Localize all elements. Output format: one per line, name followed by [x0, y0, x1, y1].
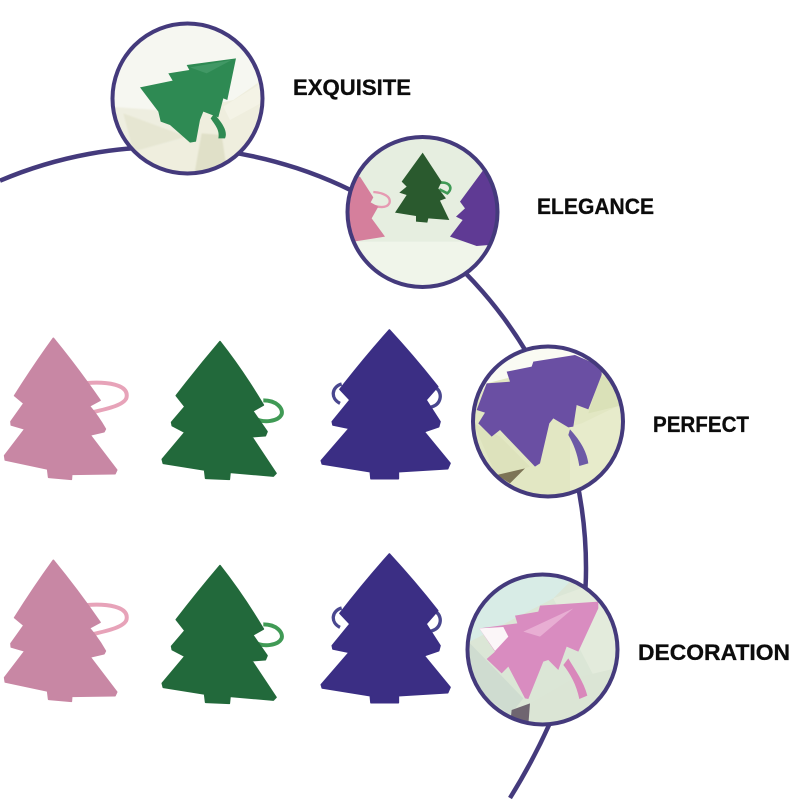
- product: pink tree ring, row 2: [5, 560, 127, 701]
- product: blue tree ring, row 2: [321, 554, 450, 703]
- photo circle: pink tree on napkin: [466, 572, 620, 726]
- product: green tree ring, row 1: [162, 342, 282, 479]
- label: ELEGANCE: ELEGANCE: [537, 194, 654, 219]
- product: pink tree ring, row 1: [5, 338, 127, 479]
- product: green tree ring, row 2: [162, 566, 282, 703]
- photo circle: three tree rings on a plate: [346, 135, 500, 289]
- product: blue tree ring, row 1: [321, 330, 450, 479]
- connecting arc: [0, 147, 586, 798]
- label: PERFECT: PERFECT: [653, 412, 750, 437]
- photo circle: green tree on napkin: [107, 20, 267, 180]
- photo circle: purple tree on napkin: [471, 344, 625, 498]
- label: EXQUISITE: EXQUISITE: [293, 75, 411, 100]
- label: DECORATION: DECORATION: [638, 640, 790, 665]
